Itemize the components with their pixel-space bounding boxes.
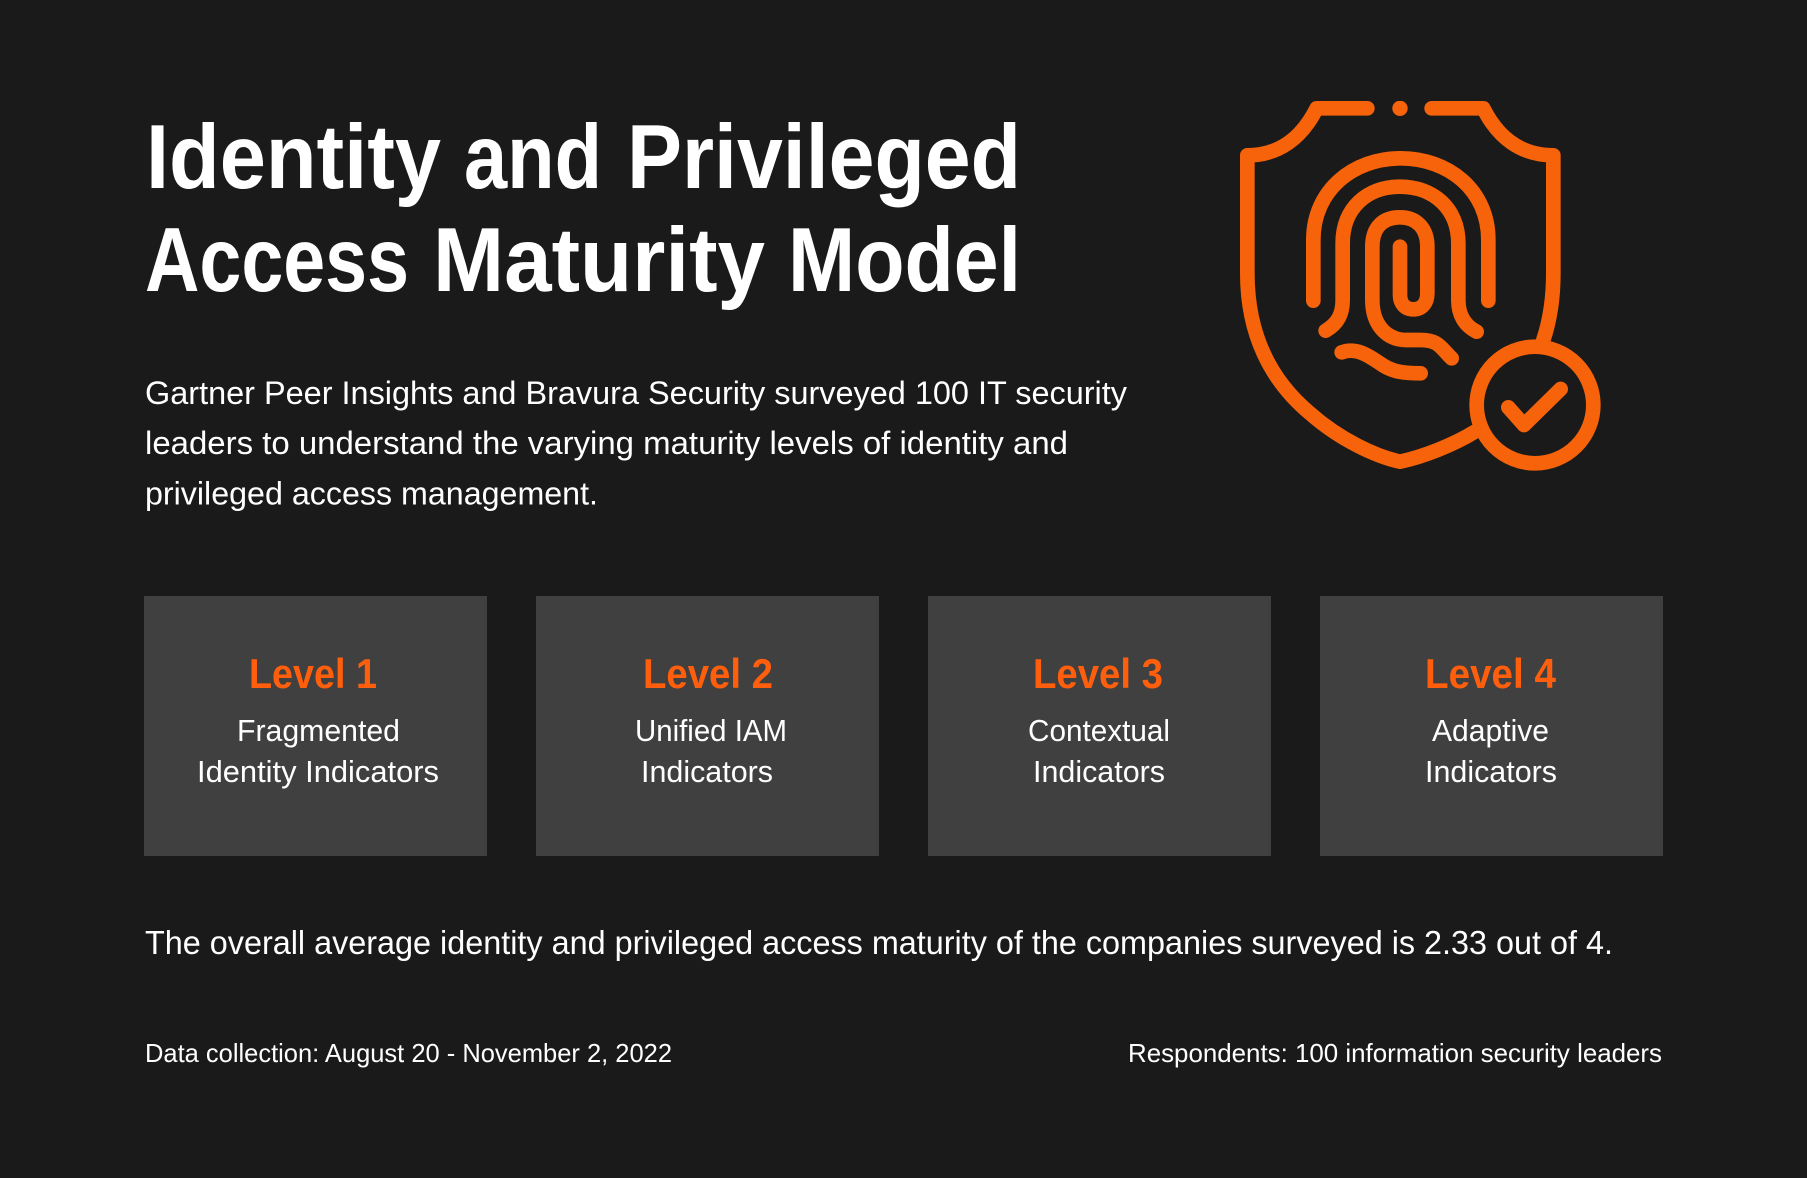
panel: level 3 <box>928 596 1271 856</box>
intro text: leaders to understand the varying maturity levels of identity and <box>145 425 1068 461</box>
panel: level 4: Level 4 <box>1425 650 1557 697</box>
intro text: privileged access management. <box>145 476 598 512</box>
panel: level 2: Unified IAM <box>635 713 787 748</box>
panel: level 1: Level 1 <box>249 650 377 697</box>
panel: level 4 <box>1320 596 1663 856</box>
title <box>145 107 1021 311</box>
panel: level 3: Indicators <box>1033 754 1165 789</box>
panel: level 4: Indicators <box>1425 754 1557 789</box>
panel: level 1: Fragmented <box>237 713 400 748</box>
panel: level 1: Identity Indicators <box>197 754 439 789</box>
title: Maturity <box>433 210 765 311</box>
panel: level 1 <box>144 596 487 856</box>
panel: level 3: Contextual <box>1028 713 1170 748</box>
intro text: Gartner Peer Insights and Bravura Security surveyed 100 IT security <box>145 375 1127 411</box>
panel: level 4: Adaptive <box>1432 713 1549 748</box>
panel: level 2: Level 2 <box>643 650 773 697</box>
title: and <box>464 107 602 208</box>
intro text <box>145 375 1127 512</box>
title: Privileged <box>627 107 1021 208</box>
panel: level 3: Level 3 <box>1033 650 1163 697</box>
title: Access <box>145 210 409 311</box>
title: Model <box>788 210 1021 311</box>
summary statement: The overall average identity and privileged access maturity of the companies surveyed is 2.33 out of 4. <box>145 924 1613 961</box>
panel: level 2: Indicators <box>641 754 773 789</box>
icon: shield with fingerprint and check mark <box>1247 101 1593 463</box>
footnote: respondents: Respondents: 100 information security leaders <box>1128 1038 1662 1068</box>
footnote: data collection: Data collection: August 20 - November 2, 2022 <box>145 1038 672 1068</box>
panel: level 2 <box>536 596 879 856</box>
title: Identity <box>146 107 441 208</box>
